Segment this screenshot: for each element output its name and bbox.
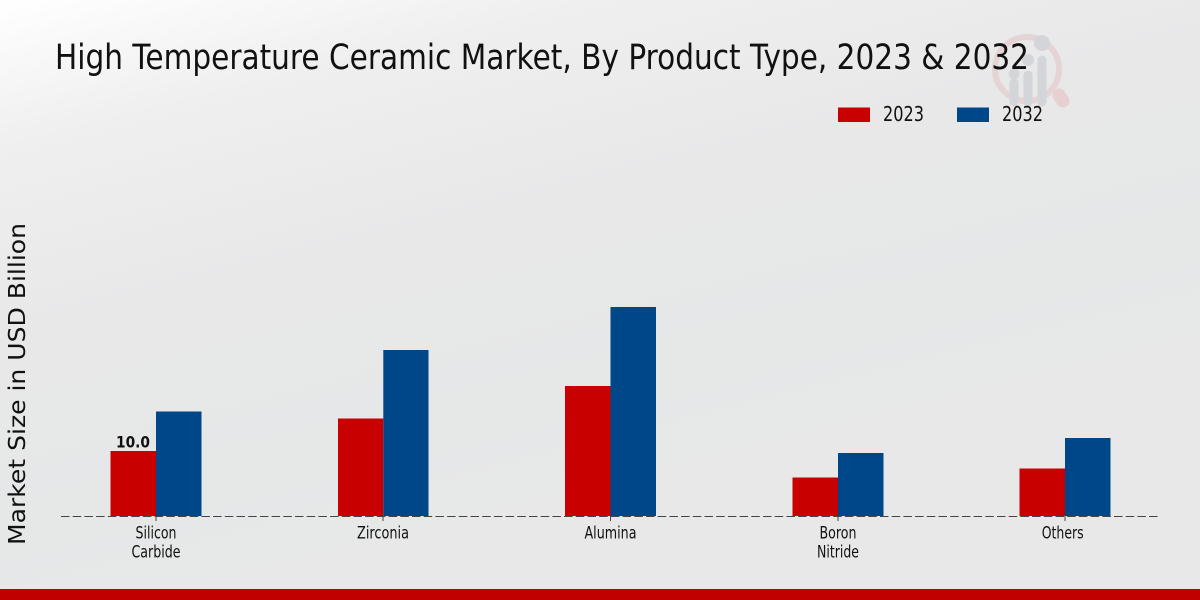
group: Silicon Carbide: Silicon — [136, 523, 176, 543]
baseline axis — [61, 516, 1160, 518]
group: Boron Nitride — [792, 453, 884, 562]
legend: 2023: 2023 — [883, 102, 924, 126]
group: Boron Nitride: Boron — [820, 523, 856, 543]
group: Others: Others — [1042, 523, 1084, 543]
y axis label: Market Size in USD Billion — [5, 223, 31, 545]
group: Alumina — [565, 307, 656, 543]
group: Silicon Carbide: 10.0 — [116, 432, 150, 452]
group: Alumina: Alumina — [584, 523, 636, 543]
legend — [838, 102, 1043, 126]
legend: 2032 — [957, 102, 1043, 126]
group: Zirconia: Zirconia — [357, 523, 409, 543]
legend: 2023 — [838, 102, 924, 126]
group: Zirconia — [338, 350, 428, 543]
bar chart — [61, 307, 1160, 562]
group: Silicon Carbide: Carbide — [132, 542, 180, 562]
group: Silicon Carbide — [110, 412, 202, 562]
group: Boron Nitride: Nitride — [817, 542, 859, 562]
icon: watermark magnifier with bars — [995, 35, 1063, 102]
title: High Temperature Ceramic Market, By Product Type, 2023 & 2032 — [55, 38, 1029, 78]
footer bar — [0, 589, 1200, 600]
group: Others — [1020, 438, 1110, 543]
legend: 2032: 2032 — [1002, 102, 1043, 126]
